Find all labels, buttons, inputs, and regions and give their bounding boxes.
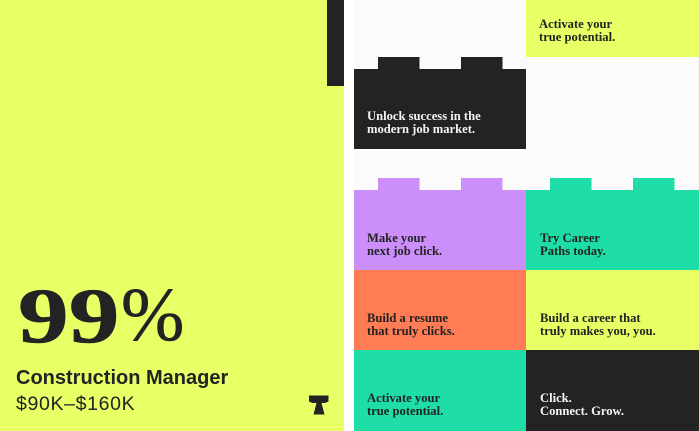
brick text: dark: Unlock success in the	[367, 109, 481, 123]
brick text: Build a resume	[367, 311, 448, 325]
brick text: green: Try Career	[540, 231, 600, 245]
brick text	[539, 17, 615, 44]
brick text: green	[540, 231, 606, 258]
panel: yellow stat card	[0, 0, 344, 431]
stat: 99%: 99	[18, 272, 119, 359]
brick text: true potential.	[367, 404, 443, 418]
stat: 99%: %	[121, 273, 184, 357]
brick text: purple: Make your	[367, 231, 426, 245]
brick text: Connect. Grow.	[540, 404, 624, 418]
brick text: Click.	[540, 391, 572, 405]
icon: logo	[309, 396, 328, 414]
brick text: Activate your	[367, 391, 440, 405]
salary range: $90K–$160K	[16, 393, 135, 415]
brick text: true potential.	[539, 30, 615, 44]
brick text: purple: next job click.	[367, 244, 442, 258]
brick text	[367, 311, 455, 338]
panel: brick wall background	[354, 0, 699, 431]
brick text: that truly clicks.	[367, 324, 455, 338]
brick: yellow top	[526, 0, 699, 57]
brick text: dark: modern job market.	[367, 122, 475, 136]
brick: purple	[354, 178, 526, 270]
brick text	[367, 391, 443, 418]
brick: yellow	[526, 270, 699, 350]
brick: green studded	[526, 178, 699, 270]
brick text	[540, 391, 624, 418]
brick text: Activate your	[539, 17, 612, 31]
stat: 99%	[18, 272, 184, 359]
brick: orange	[354, 270, 526, 350]
brick text	[540, 311, 656, 338]
brick text: purple	[367, 231, 442, 258]
brick text: Build a career that	[540, 311, 641, 325]
job title: Construction Manager	[16, 367, 228, 389]
brick: dark	[354, 57, 526, 149]
brick text: dark	[367, 109, 481, 136]
brick text: truly makes you, you.	[540, 324, 656, 338]
brick text: green: Paths today.	[540, 244, 606, 258]
brick: green	[354, 350, 526, 431]
brick: dark bottom	[526, 350, 699, 431]
dark brick edge	[327, 0, 344, 86]
